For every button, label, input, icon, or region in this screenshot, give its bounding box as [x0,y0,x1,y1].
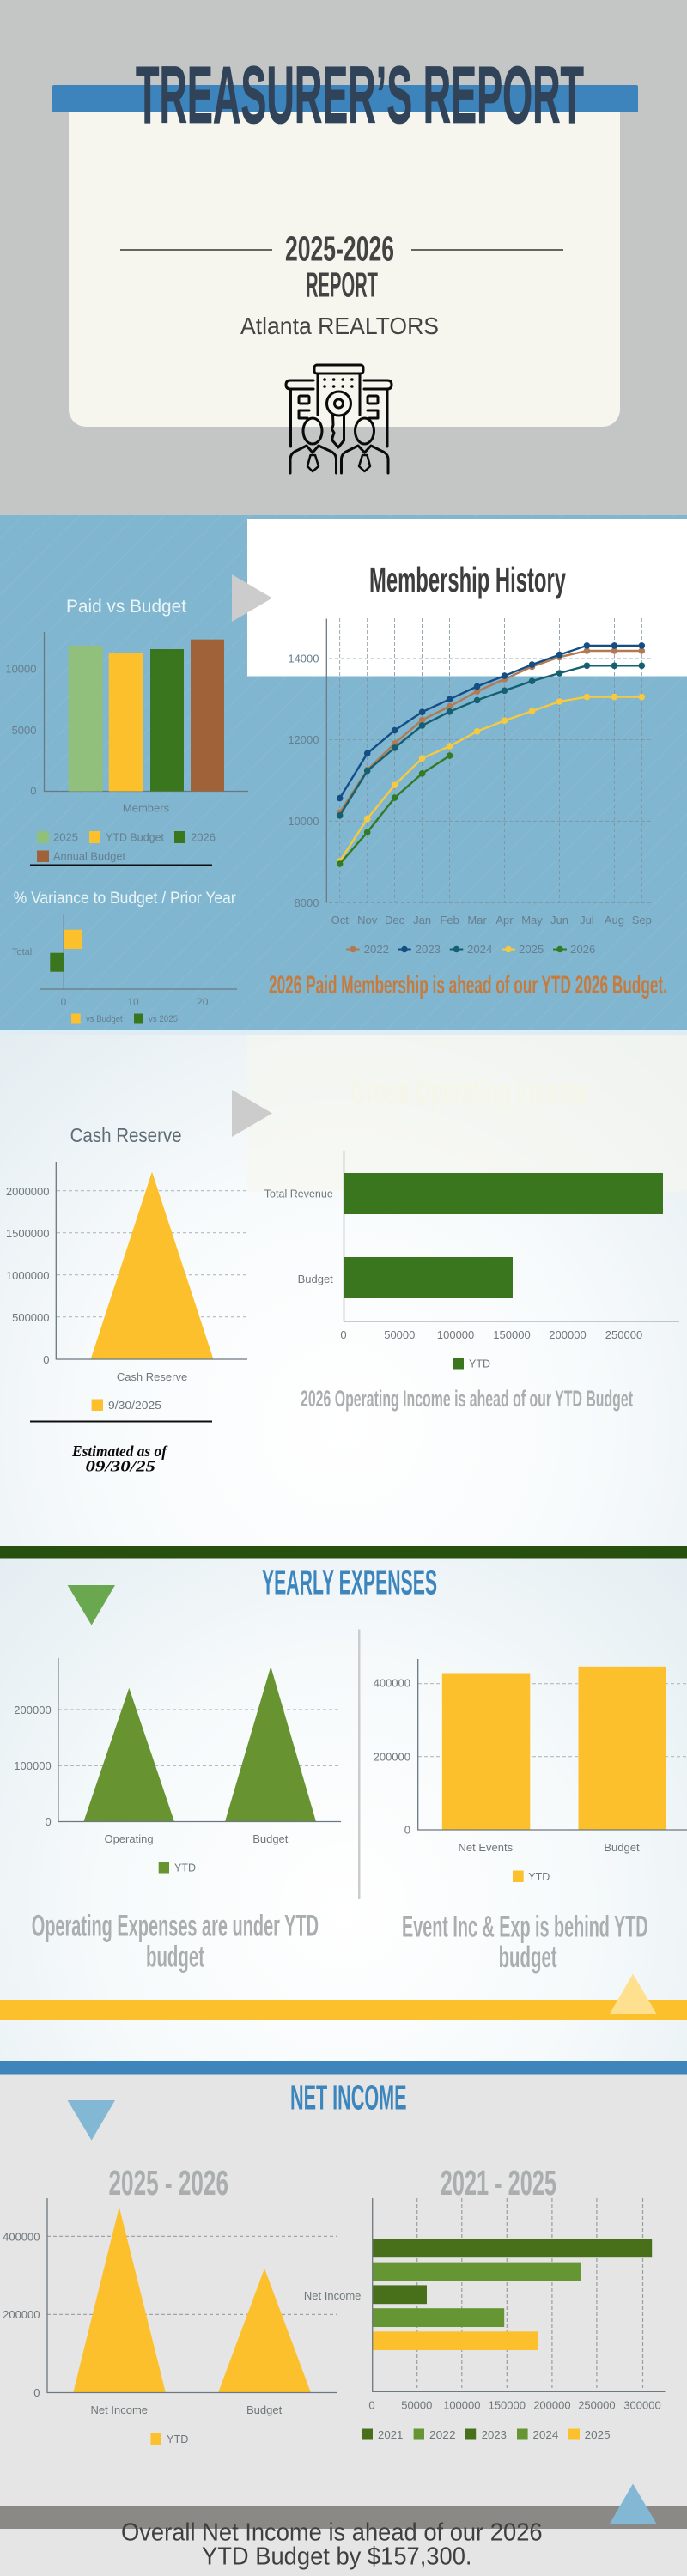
line chart: membership history: 12000 [288,733,319,746]
line chart: membership history: Oct [331,914,349,927]
line chart: membership history: Jul [580,914,594,927]
chart: cash reserve: 1000000 [6,1269,50,1282]
legend: operating income: YTD [469,1357,490,1370]
line chart: membership history: Aug [605,914,624,927]
bar chart: net events: 400000 [374,1676,410,1690]
bar chart: net income history: 0 [368,2399,375,2411]
bar chart: net events: 200000 [374,1750,410,1764]
legend: variance [71,1013,178,1024]
arrow: section pointer [232,574,272,622]
year heading: 2025-2026 [285,228,394,268]
legend: membership history: 2026 [570,943,595,956]
chart: operating expenses: 0 [45,1815,52,1828]
legend: net income history: 2022 [429,2428,456,2441]
section: membership [0,515,687,1030]
legend: variance: vs 2025 [149,1014,178,1024]
legend: operating income [453,1357,490,1370]
section: cover header: REPORT [306,264,378,304]
legend: paid vs budget: 2025 [53,831,78,843]
bar chart: net events: Budget [604,1841,640,1854]
line chart: membership history: Apr [495,914,514,927]
line: 2023 [337,642,645,801]
callout: event income and expense [402,1910,648,1974]
blue top band [0,2061,687,2075]
chart: cash reserve: 500000 [12,1311,50,1324]
legend: net income history: 2025 [585,2428,611,2441]
legend: variance: vs Budget [86,1014,123,1024]
chart divider [358,1630,361,1899]
bar chart: operating income: 200000 [549,1328,587,1341]
chart heading: 2021 - 2025: 2021 - 2025 [441,2163,556,2202]
bar chart: variance: 10 [127,996,139,1008]
bar chart: net income history [304,2198,665,2411]
legend: paid vs budget: YTD Budget [106,831,164,843]
legend: operating expenses [159,1862,196,1874]
section: cash reserve and operating income [0,1030,687,1546]
callout: operating expenses [32,1910,319,1974]
chart: operating expenses: Budget [252,1832,289,1845]
white heading panel [247,519,687,677]
line: 2024 [337,663,645,819]
legend: membership history: 2024 [467,943,492,956]
chart: cash reserve: 0 [43,1353,50,1366]
year rule lines [120,249,563,251]
line chart: membership history: 8000 [295,896,319,909]
legend: membership history: 2025 [519,943,544,956]
chart heading: variance: % Variance to Budget / Prior Year [14,890,236,908]
bar chart: variance: 20 [197,996,209,1008]
organisation name: Atlanta REALTORS [240,313,439,339]
chart: operating expenses [14,1658,341,1845]
line chart: membership history: Mar [467,914,487,927]
chart: cash reserve: 2000000 [6,1185,50,1198]
section: yearly expenses [0,1546,687,2061]
line chart: membership history: 14000 [288,653,319,665]
legend: net income history: 2023 [482,2428,507,2441]
legend: net income history [362,2428,611,2441]
chart: net income vs budget: 0 [33,2386,40,2399]
arrow: down triangle [68,2100,115,2141]
legend: net income history: 2024 [532,2428,558,2441]
legend: net events: YTD [528,1870,550,1883]
bar chart: net income history: 300000 [623,2399,661,2411]
callout: operating expenses: budget [146,1941,204,1974]
heading: net income: NET INCOME [290,2078,407,2117]
note: estimate date: 09/30/25 [86,1458,155,1475]
bar chart: operating income: 100000 [437,1328,474,1341]
line chart: membership history: Dec [385,914,405,927]
legend: paid vs budget [37,831,216,862]
bar chart: operating income: 250000 [605,1328,642,1341]
chart: net income vs budget: Budget [246,2403,283,2416]
closing statement: YTD Budget by $157,300. [202,2543,472,2571]
legend: net income history: 2021 [378,2428,403,2441]
legend: cash reserve: 9/30/2025 [108,1399,161,1412]
line chart: membership history: Jun [550,914,568,927]
bar chart: operating income: 50000 [384,1328,415,1341]
chart: net income vs budget: 400000 [3,2231,40,2243]
line chart: membership history [268,618,666,927]
closing statement [121,2519,543,2571]
bar chart: net income history: 250000 [578,2399,616,2411]
yellow band [0,2000,687,2020]
bar chart: variance [12,914,237,1008]
chart: operating expenses: 100000 [14,1759,52,1772]
legend: operating expenses: YTD [174,1862,196,1874]
bar chart: net income history: 200000 [533,2399,571,2411]
icon: buildings, key and agents [286,365,392,473]
blue title band [52,85,638,112]
chart heading: paid vs budget: Paid vs Budget [66,597,186,617]
line chart: membership history: Jan [413,914,431,927]
chart heading: cash reserve: Cash Reserve [70,1124,182,1146]
chart heading: 2025 - 2026: 2025 - 2026 [108,2163,228,2202]
line: 2022 [337,647,645,816]
legend: net income vs budget [151,2433,188,2445]
bar chart: operating income: Total Revenue [264,1187,333,1200]
chart: net income vs budget [3,2198,337,2416]
grey footer band [0,2506,687,2529]
bar chart: variance: 0 [61,996,67,1008]
bar chart: paid vs budget: 5000 [12,724,36,737]
cream heading panel [247,1035,687,1192]
callout: operating expenses: Operating Expenses are under YTD [32,1910,319,1943]
arrow: down triangle [68,1585,115,1625]
note: estimate date [71,1443,168,1475]
bar chart: variance: Total [12,947,32,957]
legend: membership history [346,943,595,956]
bar chart: operating income [264,1151,679,1341]
bar chart: net income history: 150000 [489,2399,526,2411]
bar chart: net events: Net Events [459,1841,514,1854]
line chart: membership history: Nov [357,914,378,927]
chart: net income vs budget: Net Income [91,2403,148,2416]
bar chart: net events [374,1659,687,1854]
chart: operating expenses: Operating [104,1832,154,1845]
note: estimate date: Estimated as of [71,1443,168,1460]
bar chart: operating income: 0 [340,1328,347,1341]
line chart: membership history: May [521,914,543,927]
legend: net events [513,1870,550,1883]
legend: paid vs budget: 2026 [191,831,216,843]
closing statement: Overall Net Income is ahead of our 2026 [121,2519,543,2547]
green top band [0,1546,687,1559]
chart: cash reserve: 1500000 [6,1227,50,1240]
bar chart: net events: 0 [404,1824,410,1836]
line chart: membership history: Sep [632,914,652,927]
bar chart: operating income: 150000 [493,1328,531,1341]
bar chart: net income history: 100000 [443,2399,480,2411]
bar chart: paid vs budget: 0 [30,785,36,797]
line: 2026 [337,752,453,867]
line chart: membership history: 10000 [288,815,319,828]
legend: membership history: 2022 [364,943,389,956]
arrow: up triangle [610,2483,657,2524]
legend: paid vs budget: Annual Budget [53,850,125,862]
line chart: membership history: Feb [440,914,459,927]
arrow: up triangle [610,1974,657,2014]
cover card [69,86,620,427]
bar chart: paid vs budget: Members [123,802,170,814]
divider rule [30,864,212,866]
heading: yearly expenses: YEARLY EXPENSES [262,1563,437,1602]
arrow: section pointer [232,1090,272,1137]
bar chart: net income history: Net Income [304,2289,361,2302]
bar chart: operating income: Budget [298,1273,333,1285]
chart: operating expenses: 200000 [14,1704,52,1716]
chart: net income vs budget: 200000 [3,2308,40,2321]
callout: event income and expense: budget [499,1941,557,1974]
bar chart: paid vs budget [5,632,248,814]
chart: cash reserve [6,1162,247,1383]
bar chart: paid vs budget: 10000 [5,663,36,675]
section: cover header [0,0,687,515]
line: 2025 [337,694,645,865]
legend: membership history: 2023 [416,943,441,956]
legend: net income vs budget: YTD [167,2433,188,2445]
bar chart: net income history: 50000 [401,2399,432,2411]
chart: cash reserve: Cash Reserve [117,1370,187,1383]
section: net income [0,2061,687,2576]
divider rule [30,1420,212,1422]
